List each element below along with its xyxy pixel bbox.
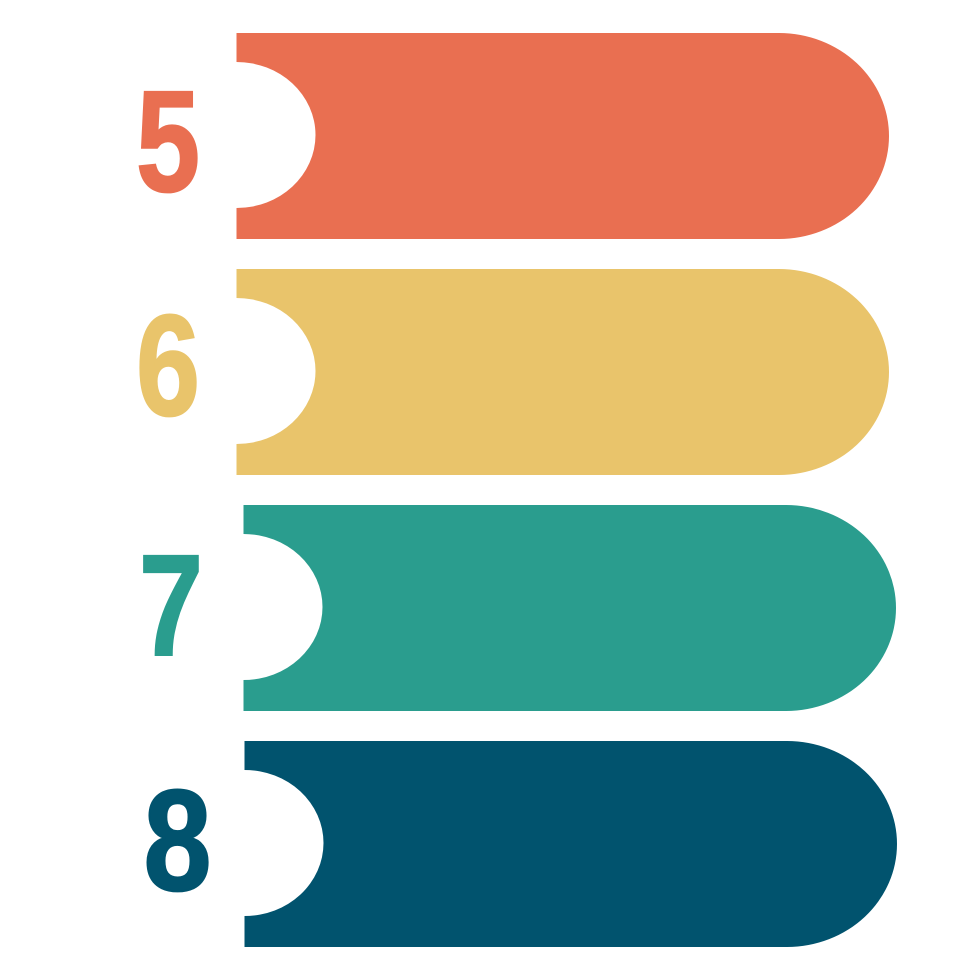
- number 7: 7: [139, 525, 203, 686]
- number 8: 8: [143, 761, 212, 921]
- number 6: 6: [136, 285, 200, 446]
- panel: bar 5: [236, 33, 889, 239]
- panel: bar 6: [236, 269, 889, 475]
- panel: bar 8: [244, 741, 897, 947]
- panel: bar 7: [244, 505, 896, 711]
- number 5: 5: [136, 61, 200, 222]
